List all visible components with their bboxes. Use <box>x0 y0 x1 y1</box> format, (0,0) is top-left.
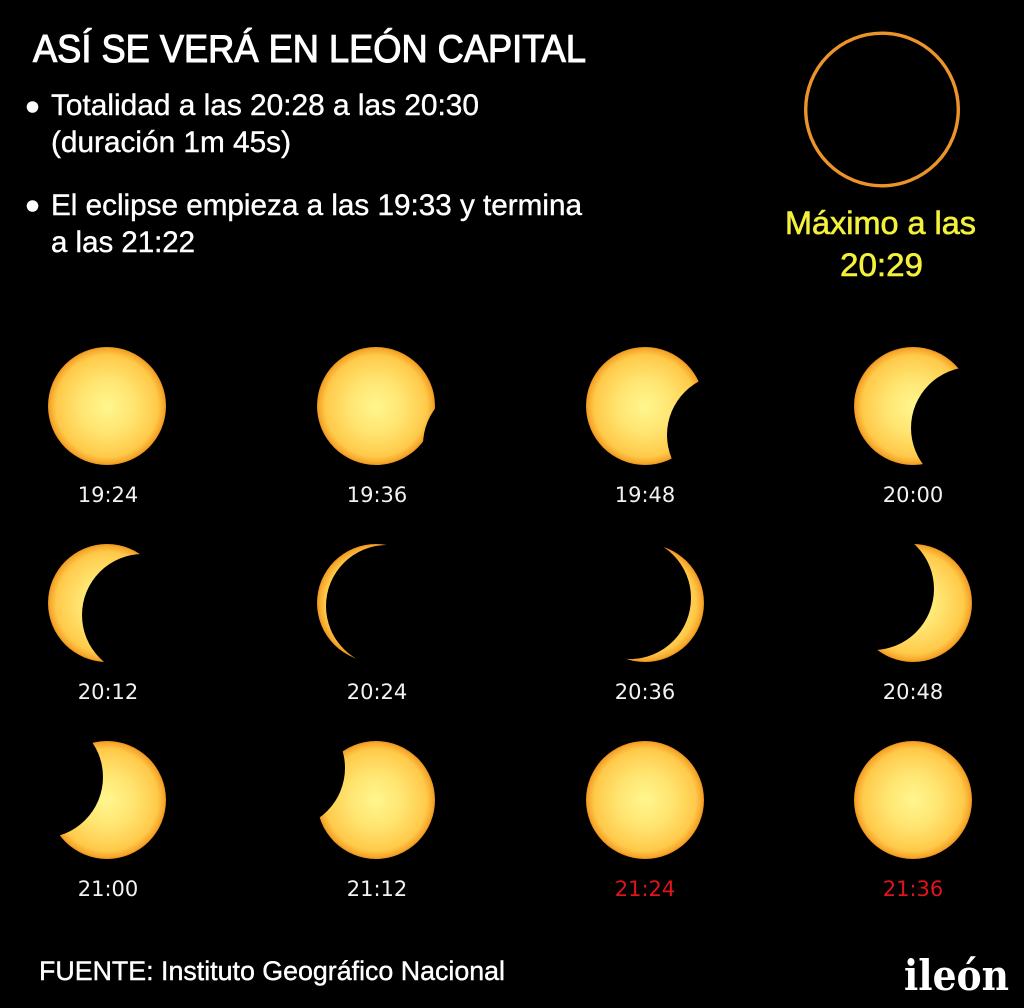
text block: eclipse start and end: a las 21:22 <box>51 226 195 259</box>
eclipse phase 19:24: 19:24 <box>78 483 138 507</box>
eclipse phase 20:00: 20:00 <box>883 483 943 507</box>
eclipse phase 20:24: 20:24 <box>347 680 407 704</box>
eclipse phase 21:36 <box>854 741 972 901</box>
eclipse phase 20:48 <box>877 544 972 700</box>
eclipse phase 20:24 <box>317 544 406 700</box>
text block: totality <box>27 89 479 159</box>
eclipse phase 21:12 <box>317 741 435 901</box>
callout: maximum time <box>785 205 976 283</box>
eclipse phase 21:36: 21:36 <box>883 877 943 901</box>
callout: maximum time: 20:29 <box>840 247 923 283</box>
eclipse phase 19:36 <box>317 347 435 507</box>
eclipse phase 21:24: 21:24 <box>615 877 675 901</box>
eclipse phase 20:12 <box>48 544 140 700</box>
logo: ileón: ileón <box>904 951 1009 1000</box>
eclipse phase 20:00 <box>854 347 958 502</box>
eclipse phase 19:36: 19:36 <box>347 483 407 507</box>
eclipse phase 20:12: 20:12 <box>78 680 138 704</box>
callout: maximum time: Máximo a las <box>785 205 976 241</box>
source note: FUENTE: Instituto Geográfico Nacional <box>39 956 505 986</box>
text block: eclipse start and end: El eclipse empieza a las 19:33 y termina <box>51 189 582 222</box>
icon: maximum eclipse ring <box>806 33 958 186</box>
eclipse phase 19:48 <box>586 347 704 507</box>
title: ASÍ SE VERÁ EN LEÓN CAPITAL <box>33 28 586 71</box>
eclipse phase 21:00 <box>60 741 166 896</box>
eclipse phase 21:12: 21:12 <box>347 877 407 901</box>
text block: totality: (duración 1m 45s) <box>51 126 291 159</box>
eclipse phase 19:24 <box>48 347 166 507</box>
eclipse phase 21:00: 21:00 <box>78 877 138 901</box>
eclipse phase 20:48: 20:48 <box>883 680 943 704</box>
eclipse phase 19:48: 19:48 <box>615 483 675 507</box>
text block: totality: Totalidad a las 20:28 a las 20:30 <box>51 89 479 122</box>
eclipse phase 20:36: 20:36 <box>615 680 675 704</box>
eclipse phase 21:24 <box>586 741 704 901</box>
eclipse phase 20:36 <box>616 546 704 700</box>
text block: eclipse start and end <box>27 189 582 259</box>
